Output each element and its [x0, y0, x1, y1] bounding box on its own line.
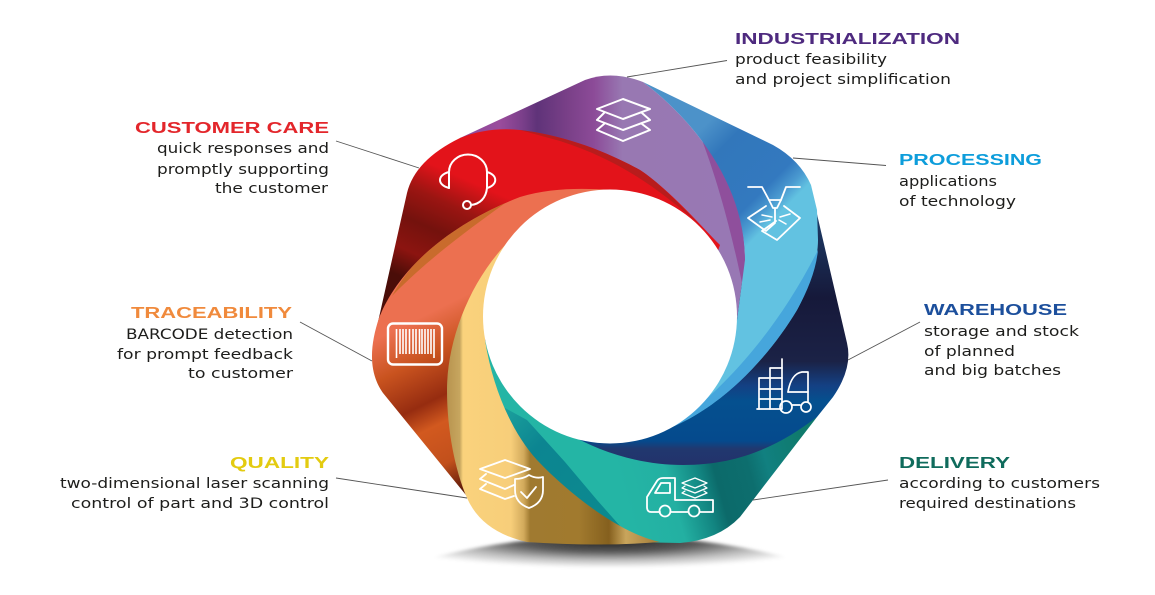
text block: quality: control of part and 3D control	[71, 496, 329, 512]
text block: industrialization: and project simplification	[735, 72, 951, 88]
band: delivery	[480, 340, 817, 543]
leader line: warehouse	[848, 322, 920, 360]
band: quality	[447, 240, 660, 544]
text block: processing: PROCESSING	[899, 152, 1042, 169]
text block: quality	[60, 455, 330, 512]
leader line: customer care	[336, 141, 419, 168]
text block: quality: two-dimensional laser scanning	[60, 476, 329, 492]
hexagonal ribbon ring	[372, 75, 848, 545]
text block: warehouse: storage and stock	[924, 324, 1080, 340]
inner hole	[483, 190, 737, 444]
icon: headset	[440, 155, 495, 209]
text block: quality: QUALITY	[230, 455, 330, 472]
text block: processing: of technology	[899, 194, 1016, 210]
text block: traceability: TRACEABILITY	[131, 305, 293, 322]
text block: customer care: promptly supporting	[157, 162, 329, 178]
text block: traceability: BARCODE detection	[126, 327, 293, 343]
leader line: quality	[336, 478, 467, 498]
band: traceability	[372, 189, 612, 500]
text block: traceability	[117, 305, 294, 382]
text block: traceability: for prompt feedback	[117, 347, 294, 363]
icon: delivery truck	[647, 478, 713, 516]
icon: layers with shield	[480, 460, 543, 508]
leader line: traceability	[300, 322, 372, 361]
text block: processing	[899, 152, 1042, 210]
text block: industrialization	[735, 31, 960, 88]
text block: warehouse: of planned	[924, 344, 1015, 360]
leader line: processing	[793, 158, 886, 166]
text block: warehouse: and big batches	[924, 363, 1061, 379]
text block: customer care: CUSTOMER CARE	[135, 120, 329, 137]
text block: warehouse	[924, 302, 1080, 379]
icon: laser cutting head	[748, 187, 800, 240]
leader line: industrialization	[627, 60, 727, 77]
text block: delivery	[899, 455, 1100, 512]
text block: delivery: according to customers	[899, 476, 1100, 492]
text block: industrialization: product feasibility	[735, 52, 887, 68]
icon: stacked layers	[597, 99, 650, 141]
text block: customer care: quick responses and	[157, 141, 329, 157]
band: warehouse	[567, 212, 848, 485]
band: industrialization	[460, 75, 745, 320]
text block: delivery: DELIVERY	[899, 455, 1011, 472]
ground shadow	[375, 536, 845, 576]
text block: industrialization: INDUSTRIALIZATION	[735, 31, 960, 48]
icon: barcode	[388, 324, 442, 364]
text block: traceability: to customer	[188, 366, 293, 382]
text block: warehouse: WAREHOUSE	[924, 302, 1067, 319]
leader line: delivery	[753, 480, 888, 500]
text block: customer care: the customer	[215, 181, 328, 197]
band: customer care	[378, 129, 720, 322]
text block: processing: applications	[899, 174, 997, 190]
text block: delivery: required destinations	[899, 496, 1076, 512]
icon: shelves and forklift	[757, 359, 811, 413]
band: processing	[640, 82, 818, 428]
text block: customer care	[135, 120, 329, 197]
